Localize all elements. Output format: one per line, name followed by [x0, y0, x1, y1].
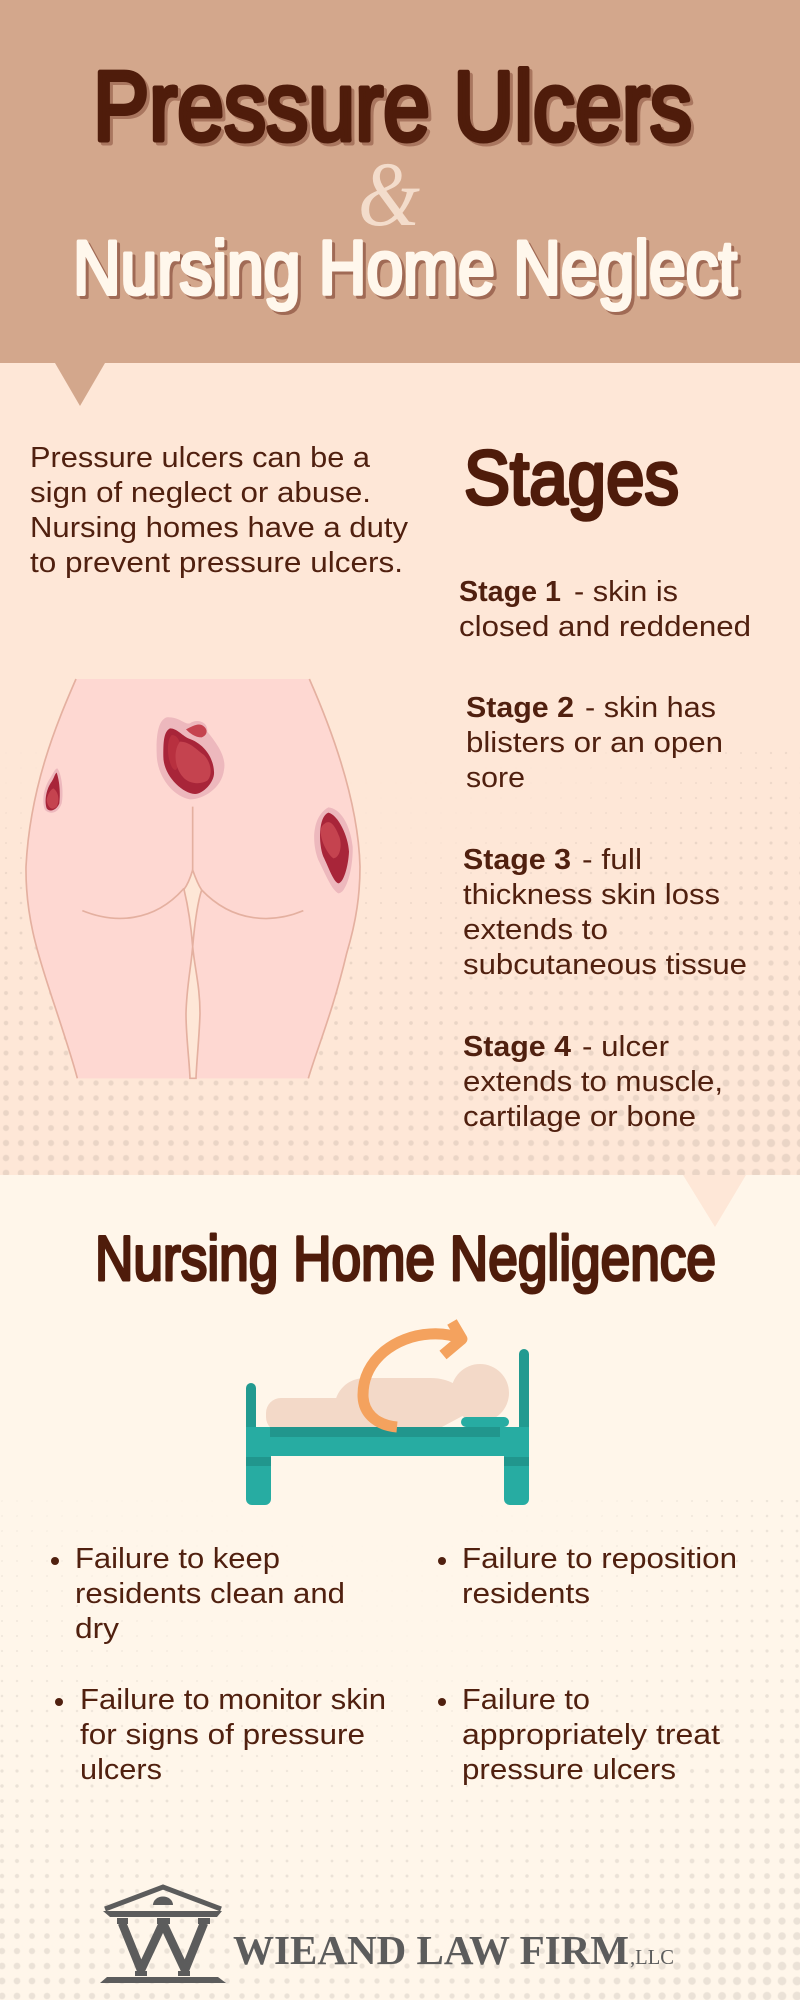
text: stage 4: extends to muscle,: [463, 1066, 723, 1098]
text: stage 4: Stage 4: [463, 1031, 571, 1063]
intro text: sign of neglect or abuse.: [30, 477, 371, 509]
list item: clean and dry: dry: [75, 1613, 120, 1645]
list item: clean and dry: residents clean and: [75, 1578, 345, 1610]
ulcer: right hip: [314, 807, 353, 893]
list item: treat ulcers: [438, 1684, 720, 1786]
panel: stages section: [0, 363, 800, 1175]
list item: clean and dry: [51, 1543, 345, 1645]
list item: reposition: [438, 1543, 737, 1610]
logo: Wieand Law Firm: WIEAND LAW FIRM: [233, 1927, 629, 1973]
ulcer: sacrum: [157, 717, 224, 799]
text: stage 2: blisters or an open: [466, 727, 723, 759]
list item: clean and dry: Failure to keep: [75, 1543, 280, 1575]
icon: patient on bed with reposition arrow: [246, 1322, 529, 1505]
heading: Stages: Stages: [464, 436, 679, 521]
intro text: to prevent pressure ulcers.: [30, 547, 403, 579]
title: Pressure Ulcers: Pressure Ulcers: [93, 51, 692, 161]
pointer triangle to stages section: [55, 363, 105, 406]
panel: title header: [0, 0, 800, 363]
list item: monitor skin: Failure to monitor skin: [80, 1684, 386, 1716]
text: stage 2: sore: [466, 762, 525, 794]
logo: Wieand Law Firm: ,LLC: [630, 1945, 674, 1969]
text: stage 4: - ulcer: [582, 1031, 670, 1063]
text: stage 3: [463, 844, 747, 981]
panel: negligence section: [0, 1175, 800, 2000]
title: ampersand: &: [358, 143, 420, 245]
text: stage 2: Stage 2: [466, 692, 574, 724]
list item: reposition: residents: [462, 1578, 590, 1610]
list item: treat ulcers: appropriately treat: [462, 1719, 720, 1751]
intro text: [30, 442, 409, 579]
text: stage 3: thickness skin loss: [463, 879, 720, 911]
text: stage 1: Stage 1: [459, 576, 561, 608]
list item: monitor skin: ulcers: [80, 1754, 162, 1786]
text: stage 3: - full: [582, 844, 642, 876]
text: stage 2: [466, 692, 723, 794]
text: stage 1: [459, 576, 751, 643]
text: stage 3: Stage 3: [463, 844, 571, 876]
text: stage 1: closed and reddened: [459, 611, 751, 643]
list item: monitor skin: for signs of pressure: [80, 1719, 365, 1751]
text: stage 2: - skin has: [585, 692, 716, 724]
intro text: Nursing homes have a duty: [30, 512, 409, 544]
list item: monitor skin: [55, 1684, 386, 1786]
text: stage 4: [463, 1031, 723, 1133]
list item: treat ulcers: Failure to: [462, 1684, 590, 1716]
text: stage 3: subcutaneous tissue: [463, 949, 747, 981]
illustration: body with pressure ulcers: [26, 679, 360, 1078]
ulcer: left hip: [43, 768, 63, 813]
logo: Wieand Law Firm: [100, 1887, 674, 1983]
text: stage 4: cartilage or bone: [463, 1101, 696, 1133]
text: stage 1: - skin is: [574, 576, 678, 608]
list item: treat ulcers: pressure ulcers: [462, 1754, 676, 1786]
list item: reposition: Failure to reposition: [462, 1543, 737, 1575]
pointer triangle to negligence section: [683, 1175, 746, 1227]
text: stage 3: extends to: [463, 914, 608, 946]
intro text: Pressure ulcers can be a: [30, 442, 370, 474]
